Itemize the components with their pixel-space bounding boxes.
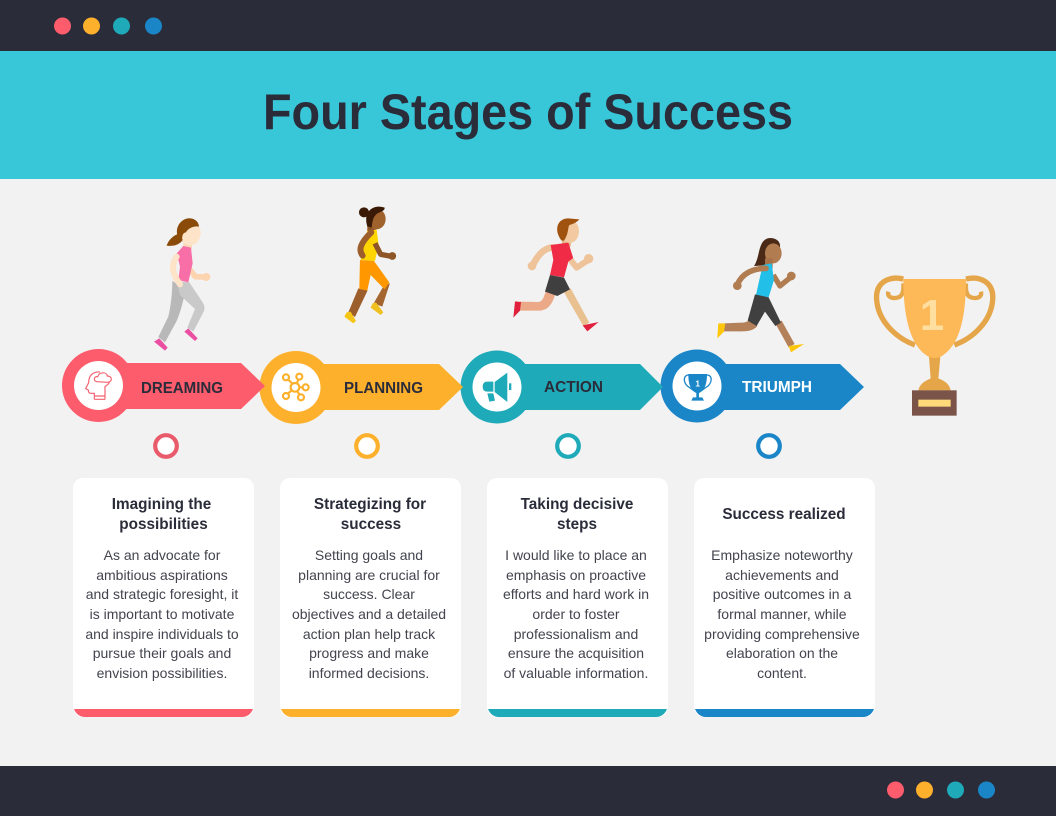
top bar with dots xyxy=(0,0,1056,51)
heading: Success realized xyxy=(722,506,846,523)
label: action: ACTION xyxy=(544,379,603,396)
heading: steps xyxy=(557,516,597,533)
body text: Emphasize noteworthy xyxy=(711,547,853,563)
icon: trophy small xyxy=(684,374,711,401)
arrow: action xyxy=(460,350,663,424)
footer bar with dots xyxy=(0,766,1056,816)
title: Four Stages of Success xyxy=(263,84,793,140)
body text: objectives and a detailed xyxy=(292,606,446,622)
body text: efforts and hard work in xyxy=(503,586,649,602)
runner: triumph xyxy=(717,238,804,352)
body text: I would like to place an xyxy=(505,547,647,563)
title banner xyxy=(0,51,1056,179)
label: triumph: TRIUMPH xyxy=(742,379,812,396)
body text: Setting goals and xyxy=(315,547,423,563)
runner: planning xyxy=(344,207,396,323)
body text: is important to motivate xyxy=(90,606,235,622)
body text: progress and make xyxy=(309,645,429,661)
body text: envision possibilities. xyxy=(97,665,227,681)
body text: of valuable information. xyxy=(504,665,648,681)
heading: possibilities xyxy=(119,516,208,533)
body text: success. Clear xyxy=(323,586,415,602)
body text: content. xyxy=(757,665,807,681)
icon: head with cloud xyxy=(86,372,111,399)
body text: elaboration on the xyxy=(726,645,838,661)
heading: Taking decisive xyxy=(521,496,633,513)
heading: Imagining the xyxy=(112,496,211,513)
body text: ensure the acquisition xyxy=(508,645,644,661)
icon: trophy small: 1 xyxy=(695,378,700,388)
panel: dreaming xyxy=(73,478,254,717)
body text: and inspire individuals to xyxy=(85,626,239,642)
arrow: dreaming xyxy=(62,349,265,422)
runner: dreaming xyxy=(154,218,210,351)
trophy xyxy=(877,278,993,416)
icon: megaphone xyxy=(483,373,511,402)
body text: formal manner, while xyxy=(717,606,847,622)
body text: ambitious aspirations xyxy=(96,567,228,583)
arrow: triumph xyxy=(660,350,864,422)
heading: success xyxy=(341,516,401,533)
arrow: planning xyxy=(260,351,463,424)
body text: providing comprehensive xyxy=(704,626,860,642)
body text: As an advocate for xyxy=(104,547,221,563)
body text: planning are crucial for xyxy=(298,567,440,583)
icon: network xyxy=(283,374,309,400)
body text: action plan help track xyxy=(303,626,436,642)
body text: positive outcomes in a xyxy=(713,586,851,602)
body text: achievements and xyxy=(725,567,839,583)
runner: action xyxy=(513,218,599,331)
label: planning: PLANNING xyxy=(344,380,423,397)
body text: professionalism and xyxy=(514,626,638,642)
panel: planning xyxy=(280,478,461,717)
body text: and strategic foresight, it xyxy=(86,586,238,602)
marker rings xyxy=(155,435,780,457)
body text: informed decisions. xyxy=(309,665,429,681)
body text: order to foster xyxy=(532,606,620,622)
label: dreaming: DREAMING xyxy=(141,380,223,397)
panel: triumph xyxy=(694,478,875,717)
body text: pursue their goals and xyxy=(93,645,231,661)
body text: emphasis on proactive xyxy=(506,567,646,583)
panel: action xyxy=(487,478,668,717)
heading: Strategizing for xyxy=(314,496,426,513)
trophy: 1 xyxy=(920,291,944,340)
